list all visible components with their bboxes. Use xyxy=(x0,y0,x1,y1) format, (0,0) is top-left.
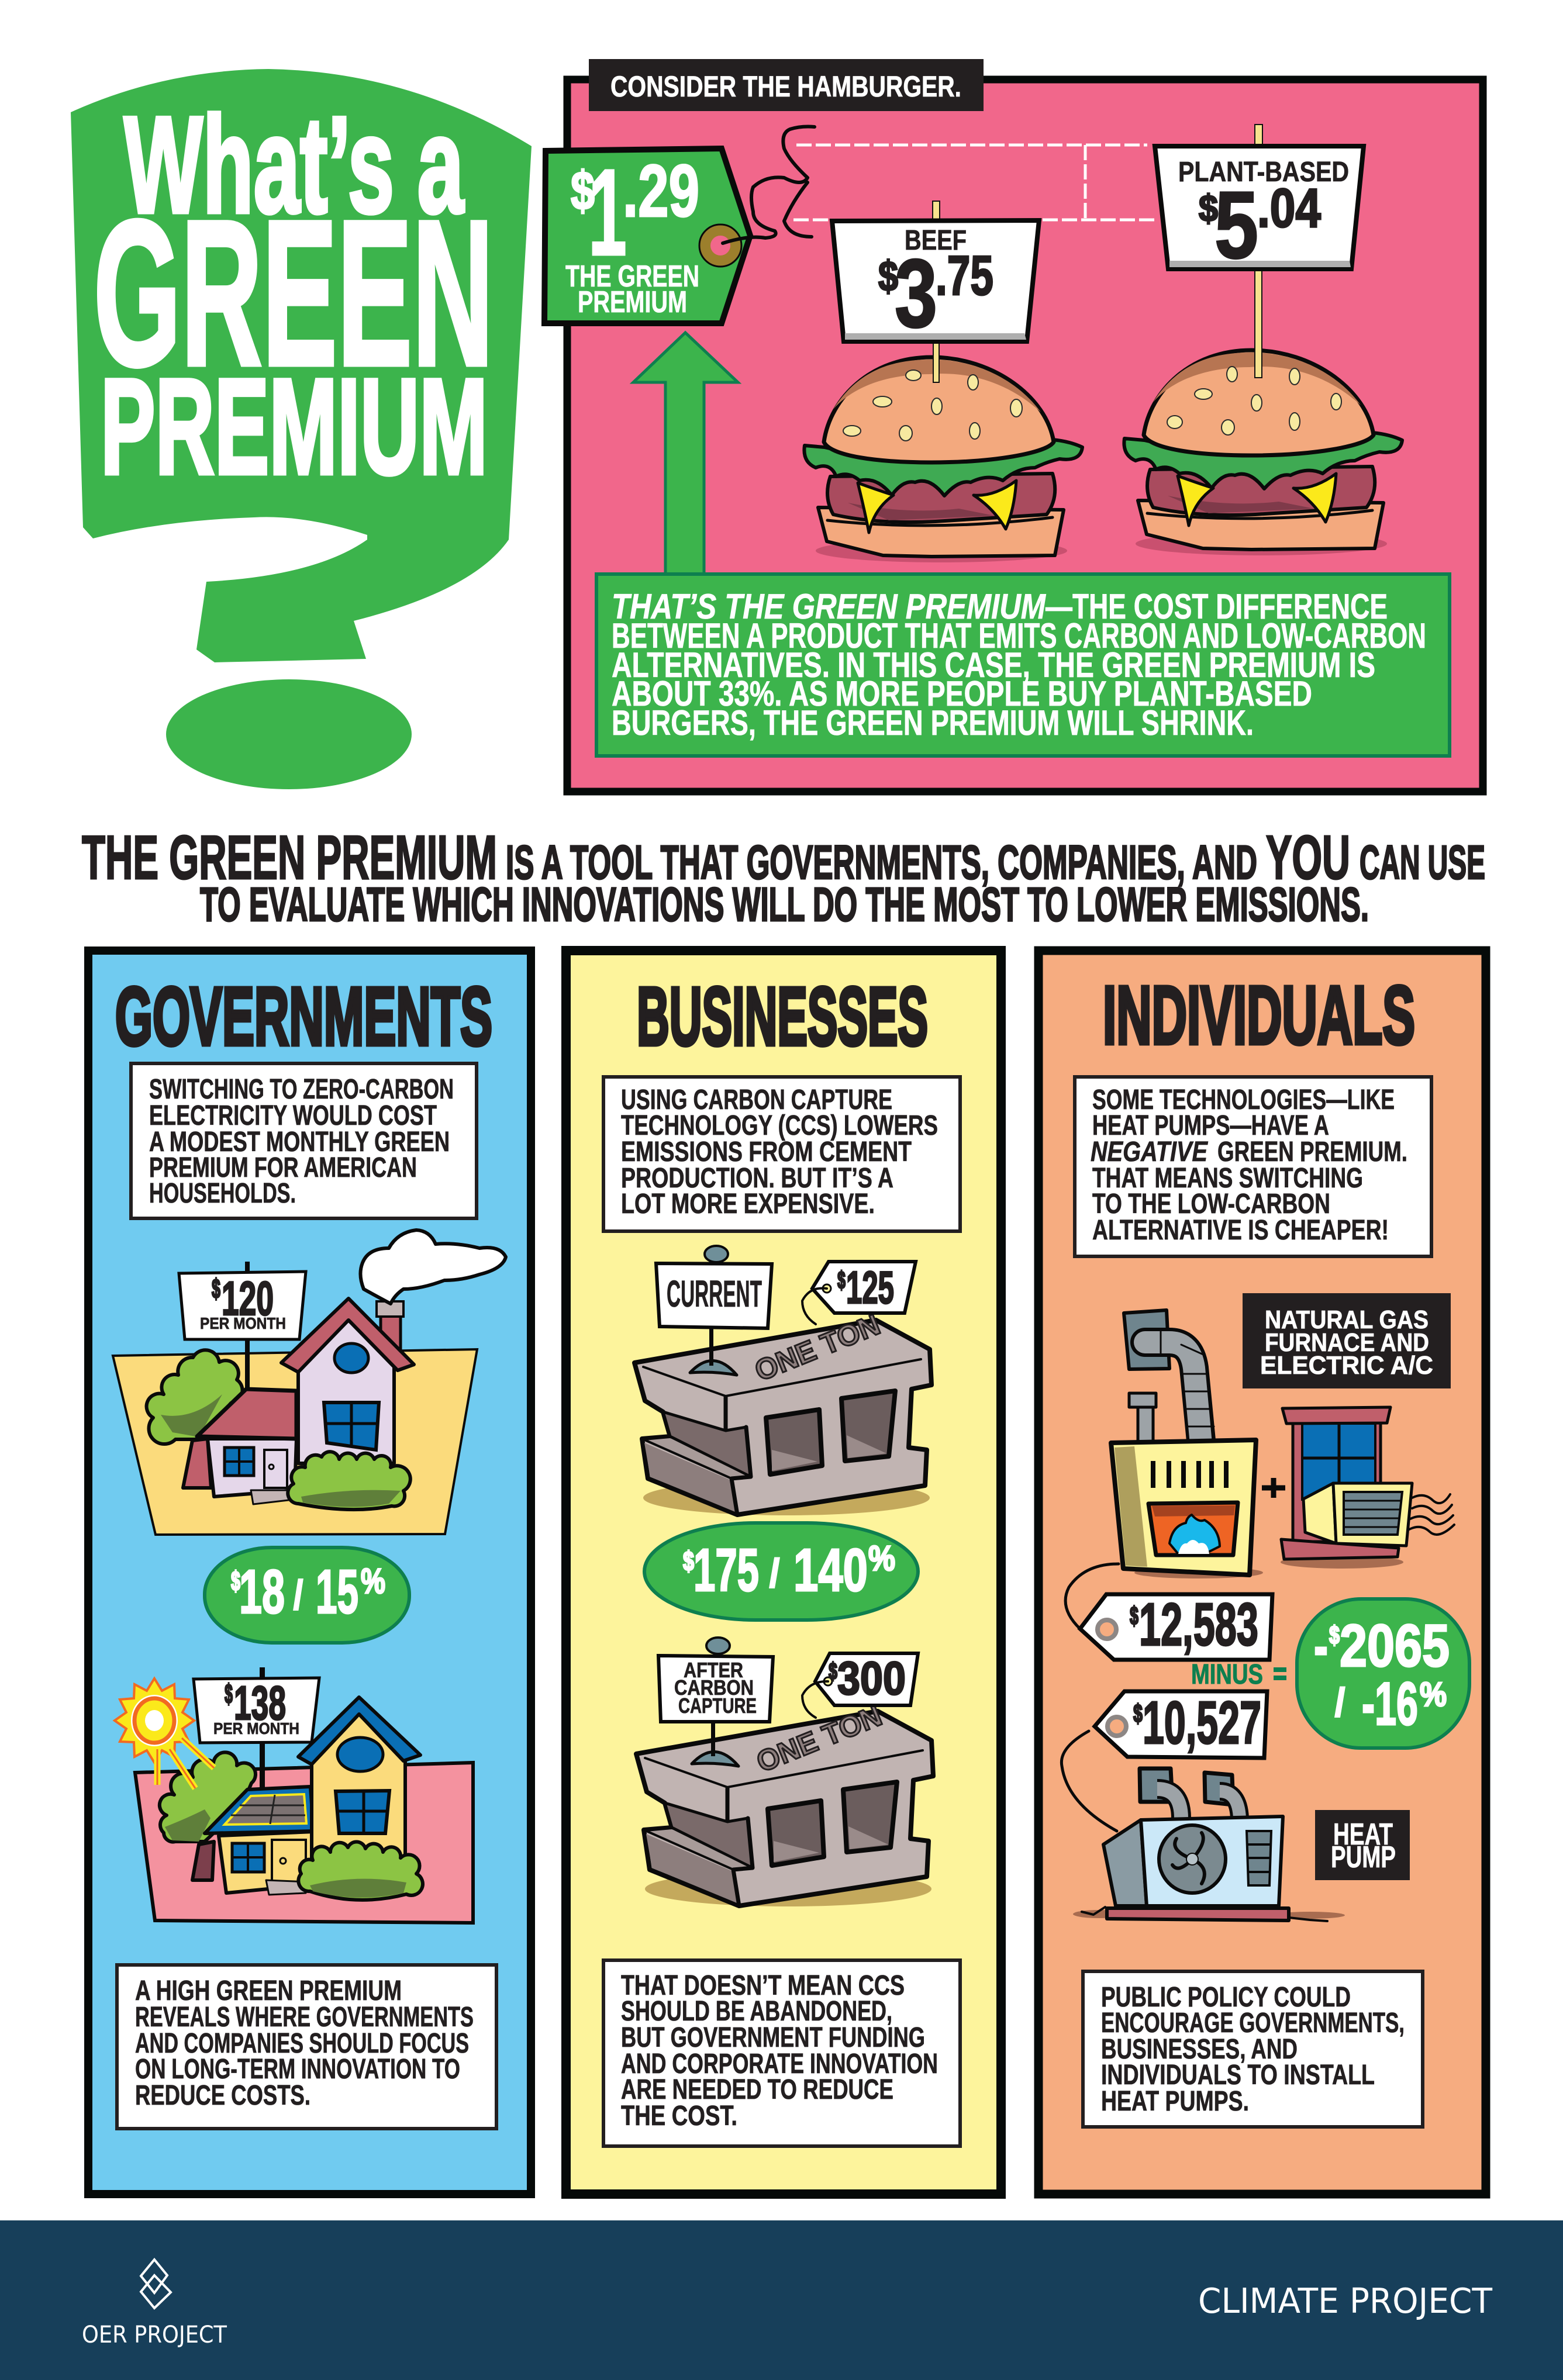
title text line 2: GREEN xyxy=(94,178,494,409)
text block: carbon capture: LOT MORE EXPENSIVE. xyxy=(621,1189,875,1220)
pill: $175 / 140%: 175 xyxy=(693,1536,759,1604)
heading: governments: GOVERNMENTS xyxy=(115,970,492,1062)
text block: carbon capture xyxy=(603,1077,960,1231)
logo: OER Project xyxy=(82,2260,227,2348)
dashed comparison lines xyxy=(793,145,1157,220)
sign: plant-based price: 5 xyxy=(1214,171,1258,278)
pill: -$2065 / -16%: / xyxy=(1335,1680,1345,1725)
main house xyxy=(312,1714,405,1861)
sun with rays xyxy=(115,1678,214,1788)
price sign: $120 per month xyxy=(179,1272,306,1339)
pill: $18 / 15%: 18 xyxy=(239,1557,285,1626)
label: heat pump: HEAT xyxy=(1333,1818,1393,1852)
pill: $18 / 15%: $ xyxy=(231,1566,240,1596)
sign: plant-based price: .04 xyxy=(1257,177,1321,239)
ONE TON stamp: ONE TON xyxy=(750,1308,885,1387)
ONE TON stamp: ONE TON xyxy=(752,1699,886,1778)
callout: that's the green premium: ABOUT 33%. AS MORE PEOPLE BUY PLANT-BASED xyxy=(612,674,1312,713)
tag: $125: $ xyxy=(837,1266,846,1294)
bush xyxy=(288,1452,410,1509)
price sign: $120 per month: $ xyxy=(212,1273,220,1304)
tag: $300: $ xyxy=(829,1659,837,1684)
text block: CCS shouldn't be abandoned: AND CORPORATE INNOVATION xyxy=(621,2049,938,2080)
main house xyxy=(298,1320,394,1463)
label: natural gas furnace and electric a/c: ELECTRIC A/C xyxy=(1260,1351,1433,1380)
price tag: the green premium: PREMIUM xyxy=(578,285,687,319)
sign: beef price: $ xyxy=(878,253,898,300)
pill: -$2065 / -16% xyxy=(1297,1599,1469,1748)
pill: -$2065 / -16%: % xyxy=(1420,1676,1447,1714)
pill: $175 / 140%: 140 xyxy=(793,1536,868,1604)
price sign: $120 per month: 120 xyxy=(222,1272,274,1325)
title: What's a Green Premium question mark xyxy=(71,69,532,789)
text block: negative green premium: TO THE LOW-CARBON xyxy=(1092,1189,1330,1220)
small house with solar roof xyxy=(219,1832,315,1893)
sign: after carbon capture: CARBON xyxy=(674,1676,754,1699)
plus sign xyxy=(1262,1478,1285,1498)
text block: carbon capture: TECHNOLOGY (CCS) LOWERS xyxy=(621,1110,938,1141)
label: heat pump xyxy=(1315,1810,1410,1880)
sign: current xyxy=(656,1246,772,1328)
price sign: $120 per month: PER MONTH xyxy=(200,1314,286,1332)
tag: $300: 300 xyxy=(837,1652,906,1704)
text block: public policy: PUBLIC POLICY COULD xyxy=(1101,1982,1351,2013)
pill: $175 / 140%: / xyxy=(770,1551,779,1595)
price tag: $10,527 xyxy=(1095,1689,1267,1758)
callout: that's the green premium: BURGERS, THE GREEN PREMIUM WILL SHRINK. xyxy=(612,703,1254,742)
sign: beef price: .75 xyxy=(936,244,993,307)
text block: CCS shouldn't be abandoned: THAT DOESN’T MEAN CCS xyxy=(621,1970,905,2001)
label: natural gas furnace and electric a/c: FURNACE AND xyxy=(1265,1328,1429,1357)
price tag: $12,583: $ xyxy=(1130,1602,1138,1631)
title text line 3: PREMIUM xyxy=(101,351,488,503)
text block: carbon capture: USING CARBON CAPTURE xyxy=(621,1084,892,1115)
fan xyxy=(1159,1825,1226,1893)
callout: that's the green premium: THAT’S THE GREEN PREMIUM xyxy=(612,587,1047,626)
pill: -$2065 / -16%: -16 xyxy=(1362,1670,1418,1738)
illustration: solar house xyxy=(115,1667,473,1923)
burger: beef xyxy=(804,357,1082,562)
illustration: window a/c xyxy=(1281,1407,1454,1569)
illustration: heat pump xyxy=(1073,1768,1345,1921)
chimney xyxy=(381,1315,401,1350)
title text line 1: What’s a xyxy=(124,88,464,241)
text block: zero-carbon electricity: ELECTRICITY WOULD COST xyxy=(149,1100,437,1131)
price sign: $138 per month: $ xyxy=(225,1678,233,1709)
text block: CCS shouldn't be abandoned: BUT GOVERNMENT FUNDING xyxy=(621,2022,925,2053)
tag: $125 xyxy=(802,1262,916,1324)
text block: negative green premium xyxy=(1075,1077,1431,1256)
headline: THE GREEN PREMIUM xyxy=(82,823,497,892)
sign: plant-based price: PLANT-BASED xyxy=(1178,157,1349,188)
small house xyxy=(208,1439,296,1497)
pill: $18 / 15% xyxy=(205,1547,409,1643)
text block: high green premium: A HIGH GREEN PREMIUM xyxy=(135,1975,402,2006)
price tag: the green premium xyxy=(544,143,750,323)
price tag: the green premium: $ xyxy=(571,160,595,221)
sign: beef price xyxy=(832,201,1039,382)
text block: high green premium: ON LONG-TERM INNOVATION TO xyxy=(135,2054,460,2085)
text block: zero-carbon electricity xyxy=(131,1063,477,1218)
text block: high green premium xyxy=(117,1965,496,2129)
burger: plant-based xyxy=(1124,350,1402,555)
text block: zero-carbon electricity: HOUSEHOLDS. xyxy=(149,1178,296,1209)
illustration: gas-powered house xyxy=(113,1230,506,1535)
pill: $175 / 140% xyxy=(644,1523,918,1620)
pill: $175 / 140%: $ xyxy=(683,1546,694,1576)
minus equals label: MINUS xyxy=(1191,1659,1263,1690)
price sign: $138 per month xyxy=(194,1677,319,1743)
callout: that's the green premium: —THE COST DIFFERENCE xyxy=(1046,587,1388,626)
sign: beef price: BEEF xyxy=(905,225,967,256)
text block: negative green premium: GREEN PREMIUM. xyxy=(1217,1137,1407,1167)
tag string xyxy=(723,126,815,243)
panel: governments xyxy=(88,951,531,2194)
sign: plant-based price xyxy=(1155,125,1364,378)
illustration: current cement block xyxy=(634,1246,931,1515)
price sign: $138 per month: 138 xyxy=(234,1677,286,1730)
label: consider the hamburger xyxy=(589,59,984,111)
price tag: the green premium: THE GREEN xyxy=(565,260,699,293)
text: climate project: CLIMATE PROJECT xyxy=(1198,2281,1493,2321)
label: natural gas furnace and electric a/c xyxy=(1243,1293,1451,1388)
label: consider the hamburger: CONSIDER THE HAMBURGER. xyxy=(610,70,961,103)
text block: CCS shouldn't be abandoned: ARE NEEDED TO REDUCE xyxy=(621,2074,893,2105)
pill: $18 / 15%: % xyxy=(361,1562,385,1601)
price sign: $138 per month: PER MONTH xyxy=(213,1719,299,1737)
text block: CCS shouldn't be abandoned: THE COST. xyxy=(621,2101,737,2132)
text block: negative green premium: THAT MEANS SWITCHING xyxy=(1092,1163,1363,1194)
panel: consider the hamburger xyxy=(544,59,1483,792)
price tag: the green premium: .29 xyxy=(623,150,699,232)
footer band xyxy=(0,2220,1563,2380)
text block: public policy: INDIVIDUALS TO INSTALL xyxy=(1101,2060,1375,2091)
headline: YOU xyxy=(1266,823,1350,892)
callout: that's the green premium xyxy=(596,574,1450,756)
price tag: $10,527: 10,527 xyxy=(1143,1689,1261,1756)
pill: -$2065 / -16%: - xyxy=(1314,1614,1328,1679)
callout: that's the green premium: ALTERNATIVES. IN THIS CASE, THE GREEN PREMIUM IS xyxy=(612,645,1375,685)
tag: $300 xyxy=(802,1652,918,1718)
heading: businesses: BUSINESSES xyxy=(637,970,928,1062)
pill: $18 / 15%: 15 xyxy=(316,1557,358,1626)
pill: $175 / 140%: % xyxy=(868,1539,895,1578)
text block: negative green premium: ALTERNATIVE IS CHEAPER! xyxy=(1092,1215,1389,1246)
text block: public policy: HEAT PUMPS. xyxy=(1101,2086,1249,2117)
pill: -$2065 / -16%: 2065 xyxy=(1340,1612,1450,1679)
label: natural gas furnace and electric a/c: NATURAL GAS xyxy=(1265,1305,1429,1334)
sign: after carbon capture xyxy=(658,1638,773,1722)
text block: CCS shouldn't be abandoned xyxy=(603,1960,960,2146)
text block: carbon capture: EMISSIONS FROM CEMENT xyxy=(621,1137,912,1167)
sign: plant-based price: $ xyxy=(1199,187,1218,229)
text block: public policy: BUSINESSES, AND xyxy=(1101,2034,1298,2065)
flame xyxy=(1169,1515,1220,1554)
sign: current: CURRENT xyxy=(667,1273,762,1315)
text block: CCS shouldn't be abandoned: SHOULD BE ABANDONED, xyxy=(621,1996,892,2027)
text block: high green premium: AND COMPANIES SHOULD FOCUS xyxy=(135,2028,469,2059)
illustration: cement block after carbon capture xyxy=(636,1638,933,1906)
panel: individuals xyxy=(1038,951,1486,2194)
text block: zero-carbon electricity: A MODEST MONTHLY GREEN xyxy=(149,1127,450,1158)
sign: after carbon capture: AFTER xyxy=(684,1658,743,1682)
text block: high green premium: REVEALS WHERE GOVERNMENTS xyxy=(135,2002,474,2033)
sign: after carbon capture: CAPTURE xyxy=(678,1694,757,1718)
text block: public policy: ENCOURAGE GOVERNMENTS, xyxy=(1101,2008,1405,2039)
heat waves xyxy=(1409,1494,1454,1535)
logo: OER Project: OER PROJECT xyxy=(82,2322,227,2348)
text block: negative green premium: SOME TECHNOLOGIES—LIKE xyxy=(1092,1084,1395,1115)
text block: negative green premium: HEAT PUMPS—HAVE A xyxy=(1092,1110,1329,1141)
bush xyxy=(298,1842,423,1900)
price tag: $12,583: 12,583 xyxy=(1139,1591,1258,1658)
pill: -$2065 / -16%: $ xyxy=(1329,1621,1340,1650)
price tag: the green premium: 1 xyxy=(588,143,627,281)
label: heat pump: PUMP xyxy=(1331,1840,1396,1874)
illustration: gas furnace xyxy=(1111,1310,1263,1578)
text block: zero-carbon electricity: PREMIUM FOR AMERICAN xyxy=(149,1152,417,1183)
text block: public policy xyxy=(1083,1971,1423,2127)
panel: businesses xyxy=(566,951,1001,2194)
text block: negative green premium: NEGATIVE xyxy=(1091,1137,1209,1167)
question mark shape xyxy=(71,69,532,662)
tag: $125: 125 xyxy=(846,1262,894,1313)
arrow: up to price tag xyxy=(633,333,738,574)
text block: high green premium: REDUCE COSTS. xyxy=(135,2080,310,2111)
tag strings xyxy=(1061,1564,1119,1831)
question mark dot xyxy=(166,679,412,789)
text block: carbon capture: PRODUCTION. BUT IT’S A xyxy=(621,1163,893,1194)
headline xyxy=(82,823,1485,931)
smoke cloud xyxy=(360,1230,506,1304)
price tag: $12,583 xyxy=(1080,1591,1272,1660)
sign: beef price: 3 xyxy=(895,240,937,348)
pill: $18 / 15%: / xyxy=(294,1572,303,1618)
price tag: $10,527: $ xyxy=(1133,1699,1143,1728)
text block: zero-carbon electricity: SWITCHING TO ZERO-CARBON xyxy=(149,1074,454,1105)
